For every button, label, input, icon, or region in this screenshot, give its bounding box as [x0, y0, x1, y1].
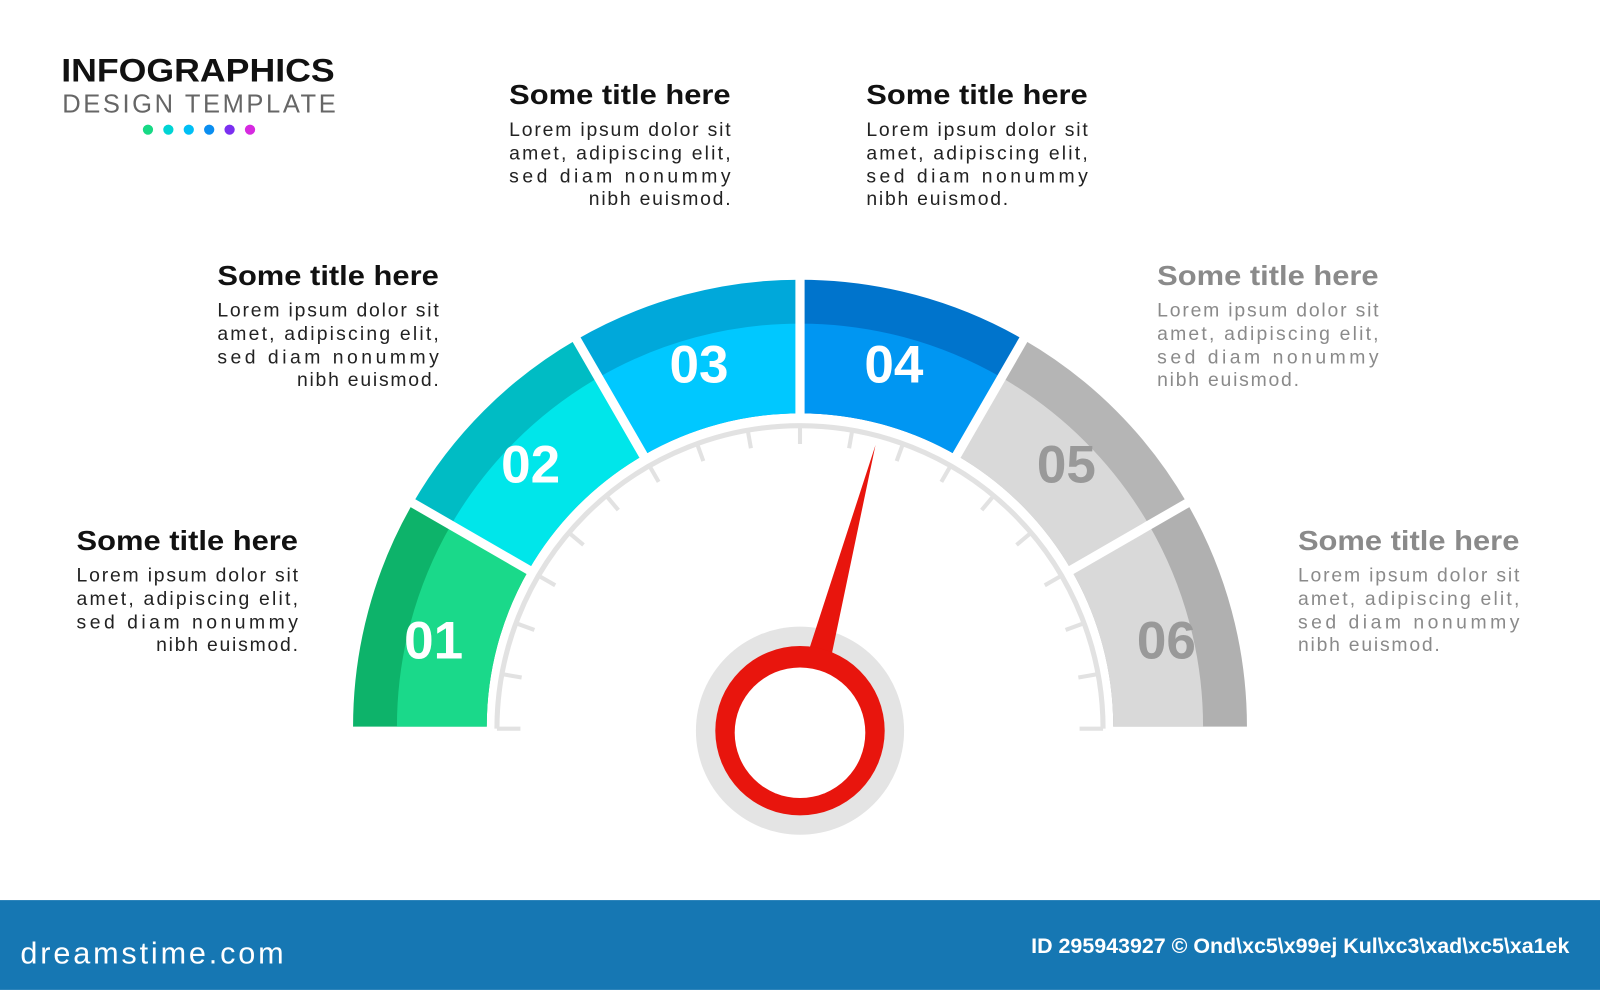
- segment numbers: 04: [864, 336, 924, 395]
- text block 02: [217, 260, 439, 391]
- footer bar: [0, 900, 1600, 990]
- text block 06: amet, adipiscing elit,: [1298, 588, 1519, 610]
- text block 02: Lorem ipsum dolor sit: [217, 299, 439, 321]
- text block 05: amet, adipiscing elit,: [1157, 323, 1379, 345]
- text block 02: sed diam nonummy: [217, 346, 439, 368]
- header: INFOGRAPHICS: [61, 52, 335, 89]
- text block 05: Some title here: [1157, 260, 1379, 291]
- text block 05: sed diam nonummy: [1157, 346, 1379, 368]
- text block 03: sed diam nonummy: [509, 166, 731, 188]
- segment 02: [471, 397, 621, 548]
- text block 03: Some title here: [509, 79, 731, 110]
- needle: [696, 445, 904, 835]
- header: DESIGN TEMPLATE: [62, 90, 336, 118]
- segment numbers: 05: [1037, 436, 1096, 495]
- text block 04: Some title here: [866, 79, 1088, 110]
- gauge: [407, 273, 1193, 727]
- segment 03: [610, 347, 800, 416]
- text block 01: nibh euismod.: [156, 634, 298, 656]
- text block 06: sed diam nonummy: [1298, 612, 1520, 634]
- text block 01: [77, 525, 299, 656]
- text block 02: nibh euismod.: [297, 369, 439, 391]
- text block 05: [1157, 260, 1379, 391]
- segment numbers: 06: [1137, 611, 1196, 670]
- segment numbers: 01: [404, 611, 463, 670]
- text block 04: Lorem ipsum dolor sit: [866, 119, 1088, 141]
- segment 06: [1110, 537, 1180, 727]
- text block 06: nibh euismod.: [1298, 634, 1440, 656]
- text block 04: [866, 79, 1088, 210]
- text block 01: Lorem ipsum dolor sit: [77, 565, 299, 587]
- text block 06: Some title here: [1298, 525, 1519, 556]
- text block 03: amet, adipiscing elit,: [509, 142, 731, 164]
- segment 01: [420, 537, 490, 727]
- text block 04: amet, adipiscing elit,: [866, 142, 1088, 164]
- segment numbers: 03: [669, 336, 728, 395]
- header: [61, 52, 336, 135]
- scale ticks: [497, 424, 1103, 729]
- text block 03: [509, 79, 731, 210]
- text block 02: Some title here: [217, 260, 439, 291]
- segment numbers: [404, 336, 1196, 670]
- text block 04: sed diam nonummy: [866, 166, 1088, 188]
- footer bar: dreamstime.com: [20, 936, 284, 970]
- text block 04: nibh euismod.: [866, 188, 1008, 210]
- footer bar: ID 295943927 © Ond\xc5\x99ej Kul\xc3\xad\xc5\xa1ek: [1031, 934, 1569, 958]
- text block 05: Lorem ipsum dolor sit: [1157, 299, 1379, 321]
- text block 03: Lorem ipsum dolor sit: [509, 119, 731, 141]
- text block 05: nibh euismod.: [1157, 369, 1299, 391]
- text block 06: Lorem ipsum dolor sit: [1298, 565, 1520, 587]
- text block 03: nibh euismod.: [589, 188, 731, 210]
- text block 01: sed diam nonummy: [77, 612, 298, 634]
- text block 02: amet, adipiscing elit,: [217, 323, 439, 345]
- segment 05: [979, 397, 1129, 548]
- text block 01: Some title here: [77, 525, 298, 556]
- text block 01: amet, adipiscing elit,: [77, 588, 298, 610]
- text block 06: [1298, 525, 1520, 656]
- segment numbers: 02: [501, 436, 560, 495]
- segment 04: [800, 347, 990, 416]
